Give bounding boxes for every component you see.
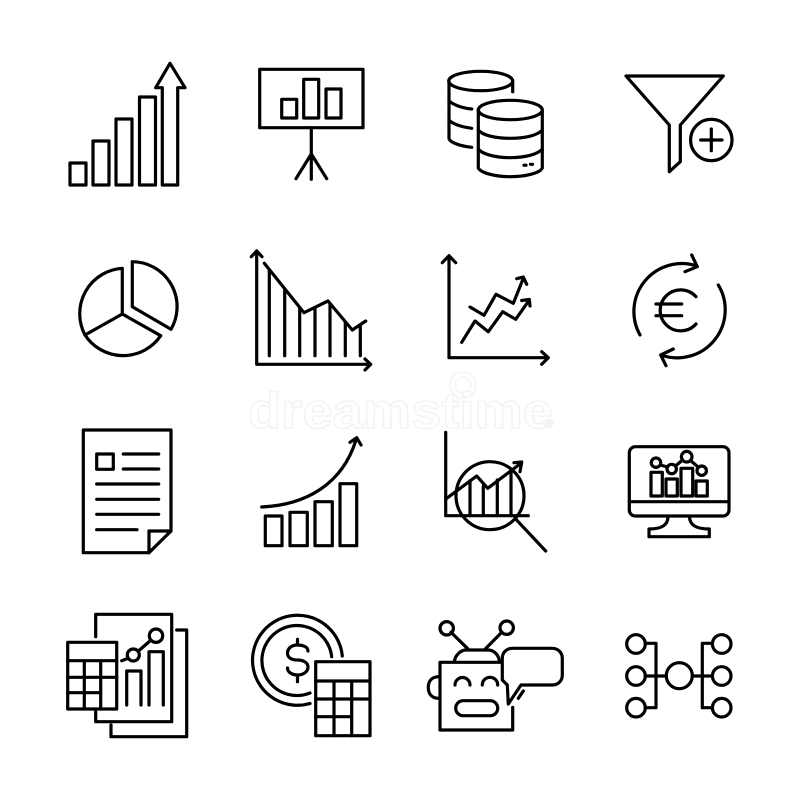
icon: spreadsheet with report pages — [68, 614, 187, 737]
icon: dollar coin with calculator — [253, 615, 370, 736]
icon: database stacks — [449, 71, 542, 177]
icon: declining bar and line chart — [251, 251, 371, 370]
icon: chat robot — [428, 621, 562, 730]
icon: document — [83, 430, 171, 553]
icon: rising bars with arrow — [70, 63, 185, 185]
icon: funnel with plus — [626, 76, 732, 172]
icon: rising trend arrows chart — [442, 256, 548, 364]
icon: pie chart — [80, 262, 177, 356]
icon: node hierarchy diagram — [627, 635, 731, 717]
watermark: dreamstime — [248, 383, 553, 439]
icon: euro exchange — [634, 255, 725, 366]
icon: growth curve over bars — [262, 438, 361, 546]
icon: monitor with chart — [629, 447, 729, 537]
icon: magnifier over chart — [446, 432, 546, 551]
icon: presentation board — [260, 69, 363, 179]
